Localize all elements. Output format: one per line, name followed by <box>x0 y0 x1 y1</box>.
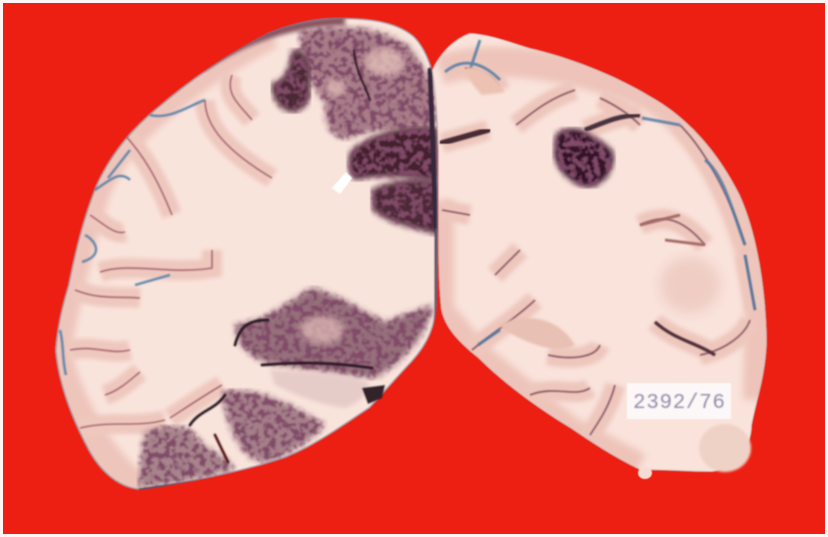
right dark sulci <box>442 130 488 143</box>
left hemisphere <box>55 18 438 490</box>
tumour: right middle mass <box>349 127 438 180</box>
left meningeal blue vessels <box>60 100 205 375</box>
specimen label <box>627 383 731 419</box>
left hemisphere dark rim <box>55 18 438 490</box>
tumour: crescent gyrus <box>272 49 310 112</box>
right hemisphere white matter <box>432 33 767 472</box>
bulge at lower edge <box>699 424 751 472</box>
left sulci lines <box>70 75 272 428</box>
specimen label: 2392/76 <box>633 392 725 415</box>
right sulci lines <box>442 68 755 435</box>
tumour: upper frontal mass <box>300 27 436 139</box>
small tissue nub <box>638 467 652 479</box>
tumour: right lower mass <box>372 180 438 235</box>
tumour lobe protruding at edge <box>362 385 385 404</box>
left cortex band <box>55 32 270 490</box>
left top dura rim <box>200 21 345 68</box>
tumour: temporal lower mass <box>235 288 432 378</box>
left hemisphere white matter <box>55 18 438 490</box>
right tumour deposit <box>554 129 614 187</box>
right hemisphere <box>432 33 767 479</box>
right cortex around sulci <box>442 68 755 435</box>
tumour: bottom masses <box>222 390 325 462</box>
tumour pale centres <box>365 48 405 76</box>
right deep grey nuclei <box>660 257 720 313</box>
tumour: lower gyrus <box>270 370 369 408</box>
left cortex around sulci <box>70 75 272 428</box>
right hemisphere rim <box>432 33 767 472</box>
small white highlight <box>332 172 352 194</box>
right cortex band <box>440 62 760 400</box>
right blue meningeal vessels <box>445 40 755 345</box>
dark sulcal fissures in tumour <box>140 50 436 490</box>
